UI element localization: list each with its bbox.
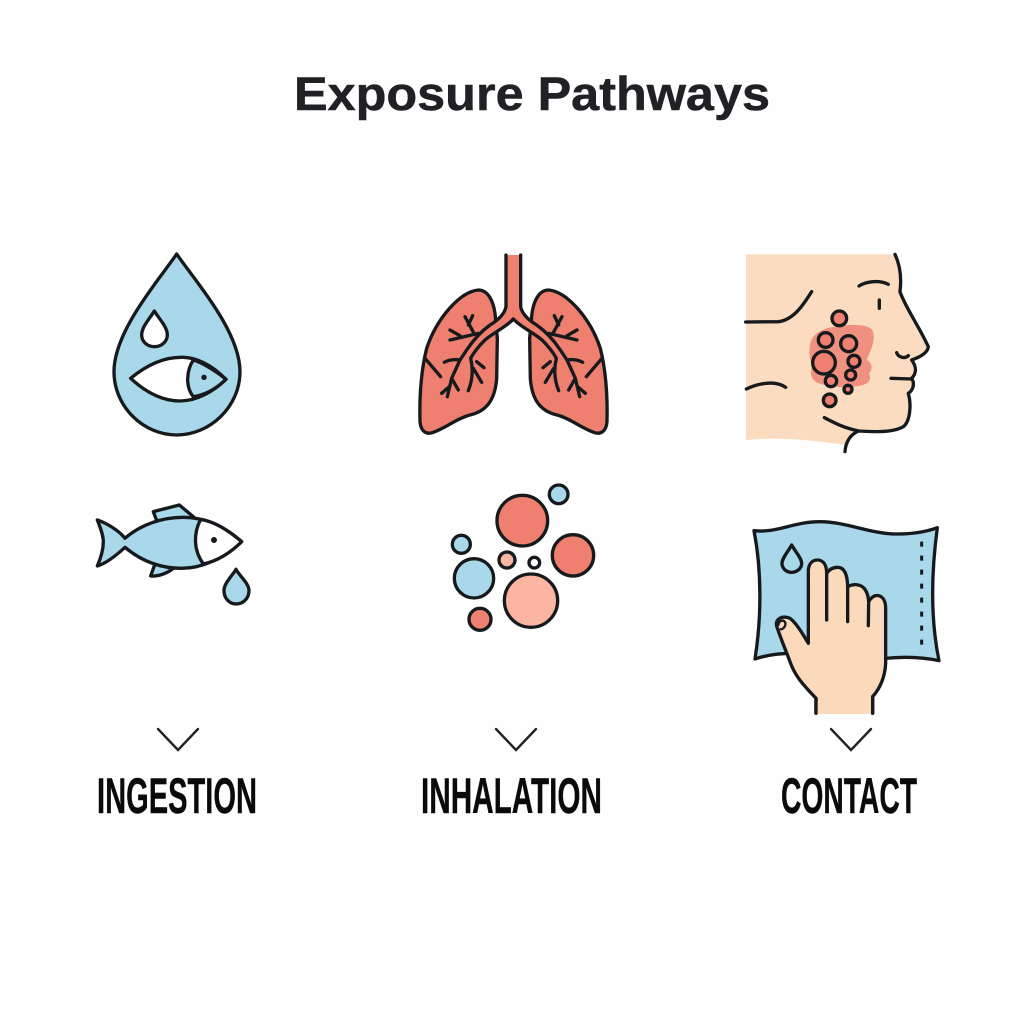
label: inhalation: INHALATION <box>421 768 602 824</box>
label: contact: CONTACT <box>781 768 917 824</box>
arrow: ingestion chevron <box>158 729 198 750</box>
rash patch <box>809 325 874 387</box>
icon: face with rash <box>746 254 928 452</box>
title: Exposure Pathways <box>294 67 770 120</box>
icon: airborne particles <box>452 485 594 630</box>
arrow: inhalation chevron <box>496 729 536 750</box>
icon: hand wiping with cloth <box>754 522 939 714</box>
icon: lungs <box>420 255 607 433</box>
icon: water drop with fish <box>114 254 240 435</box>
label: ingestion: INGESTION <box>97 768 257 824</box>
icon: fish with droplet <box>97 505 249 604</box>
arrow: contact chevron <box>831 729 871 750</box>
